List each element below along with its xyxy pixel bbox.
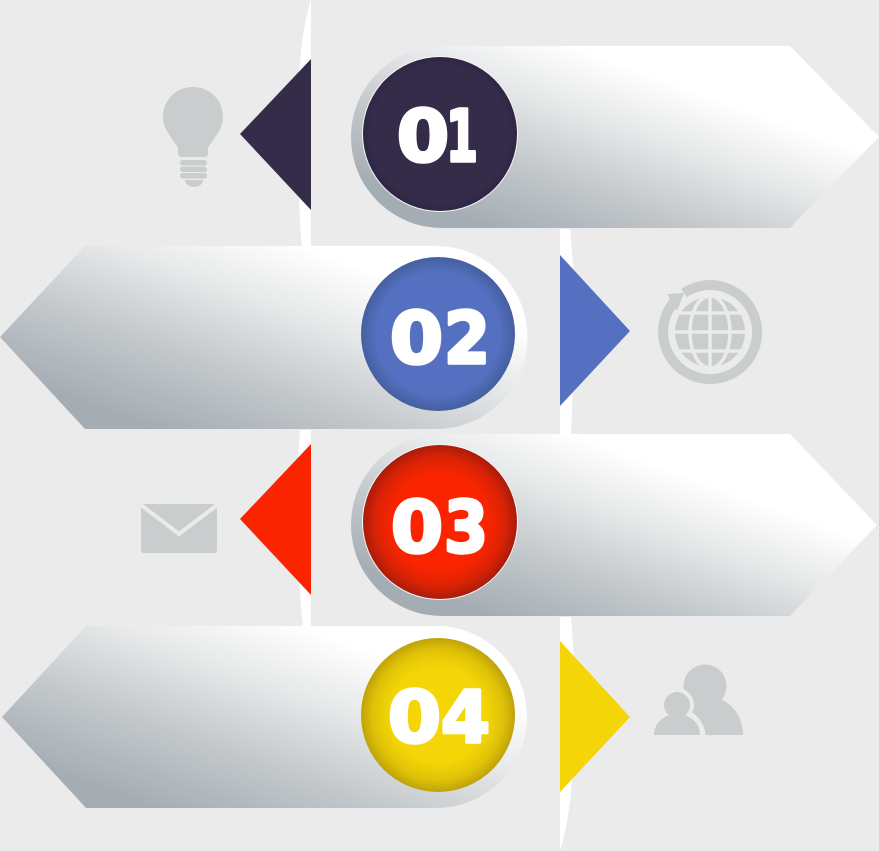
number 02: 0 [390,297,443,380]
number 02 [390,297,490,380]
step 3 triangle [240,444,311,595]
step 3 group [141,430,877,626]
step 2 group [0,229,757,434]
icon: light bulb [163,87,223,187]
number 01: 1 [446,95,478,178]
step 1 triangle [240,59,311,210]
step 4 arrow banner [2,626,527,808]
number 03: 0 [391,486,443,569]
number 03 [391,486,488,569]
icon: envelope [141,504,217,553]
step 2 triangle [560,255,630,406]
number 01 [397,95,478,178]
icon: people [646,664,743,740]
number 04: 0 [388,676,441,759]
step 4 number badge [361,638,515,792]
step 4 group [2,617,743,851]
icon: globe [663,285,757,379]
number 04 [388,676,490,759]
number 04: 4 [441,676,490,759]
step 3 number badge [362,444,518,600]
number 03: 3 [444,486,488,569]
step 1 number badge [362,56,518,212]
number 01: 0 [397,95,449,178]
step 4 triangle [560,641,630,792]
number 02: 2 [444,297,490,380]
step 1 group [163,0,879,246]
step 1 arrow banner [351,46,879,228]
step 3 arrow banner [351,434,877,616]
step 2 arrow banner [0,246,527,429]
step 2 number badge [361,257,515,411]
